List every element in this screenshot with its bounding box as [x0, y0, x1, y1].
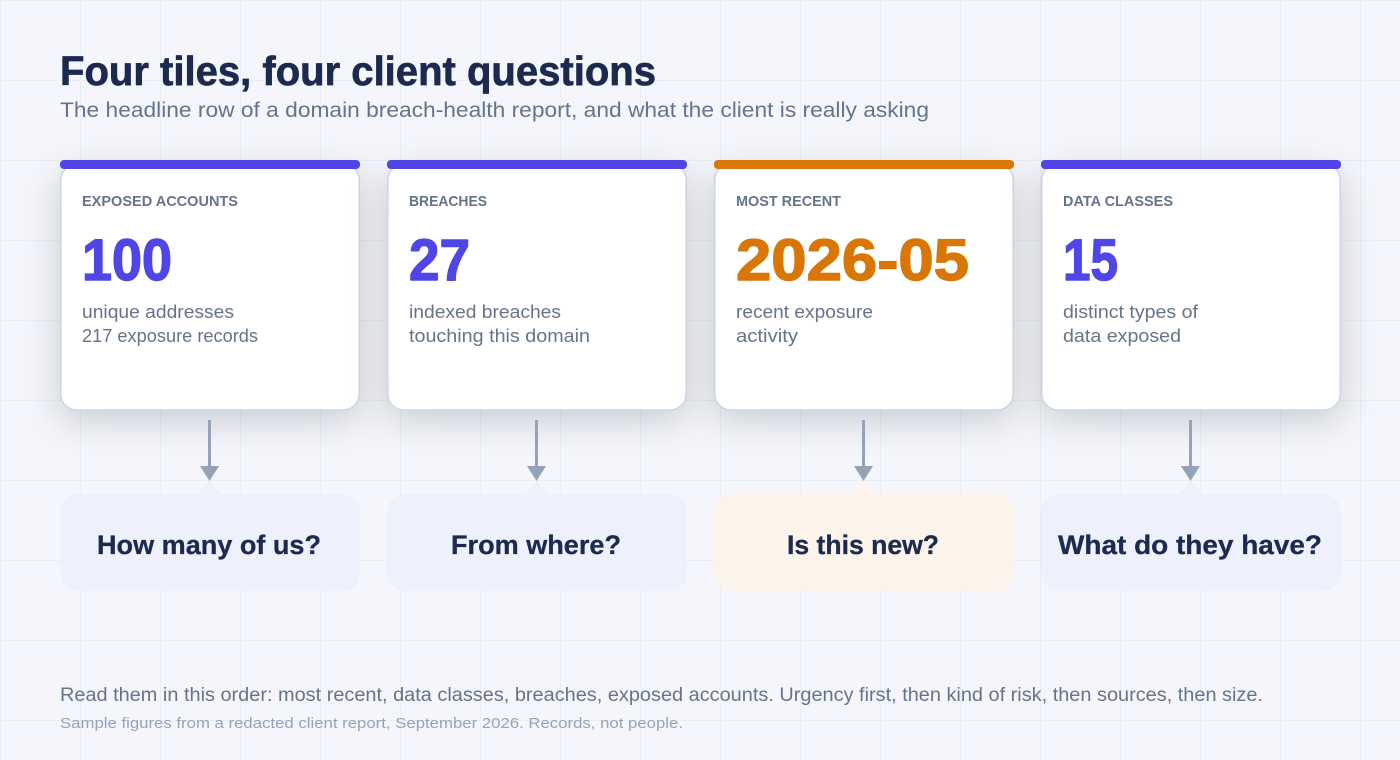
panel: most recent tile — [714, 160, 1014, 410]
footer note: Read them in this order: most recent, data classes, breaches, exposed accounts. Urgency first, then kind of risk, then sources, then size. — [60, 685, 1263, 706]
arrow: data classes to question — [1181, 420, 1200, 481]
tile value: 27 — [409, 228, 470, 293]
tile description: 217 exposure records — [82, 325, 258, 346]
tile label: EXPOSED ACCOUNTS — [82, 193, 238, 210]
callout: what do they have: What do they have? — [1058, 530, 1322, 560]
tile description: recent exposure — [736, 301, 873, 322]
panel: breaches tile — [387, 160, 687, 410]
panel: data classes tile — [1041, 160, 1341, 410]
callout: is this new: Is this new? — [787, 530, 939, 560]
tile description: data exposed — [1063, 325, 1181, 346]
tile description: touching this domain — [409, 325, 590, 346]
callout: what do they have — [1041, 481, 1341, 591]
callout: from where — [387, 481, 687, 591]
arrow: exposed accounts to question — [200, 420, 219, 481]
tile value: 100 — [82, 228, 172, 293]
callout: from where: From where? — [451, 530, 621, 560]
source note: Sample figures from a redacted client report, September 2026. Records, not people. — [60, 715, 683, 732]
tile label: MOST RECENT — [736, 193, 841, 210]
arrow: most recent to question — [854, 420, 873, 481]
arrow: breaches to question — [527, 420, 546, 481]
tile value: 15 — [1063, 228, 1118, 293]
title: Four tiles, four client questions — [60, 48, 656, 94]
callout: how many of us — [60, 481, 360, 591]
tile description: distinct types of — [1063, 301, 1199, 322]
tile description: activity — [736, 325, 799, 346]
tile description: unique addresses — [82, 301, 234, 322]
subtitle: The headline row of a domain breach-health report, and what the client is really asking — [60, 99, 929, 122]
tile label: BREACHES — [409, 193, 487, 210]
panel: exposed accounts tile — [60, 160, 360, 410]
tile value: 2026-05 — [736, 228, 969, 293]
tile label: DATA CLASSES — [1063, 193, 1173, 210]
tile description: indexed breaches — [409, 301, 561, 322]
callout: is this new — [714, 481, 1014, 591]
callout: how many of us: How many of us? — [97, 530, 321, 560]
